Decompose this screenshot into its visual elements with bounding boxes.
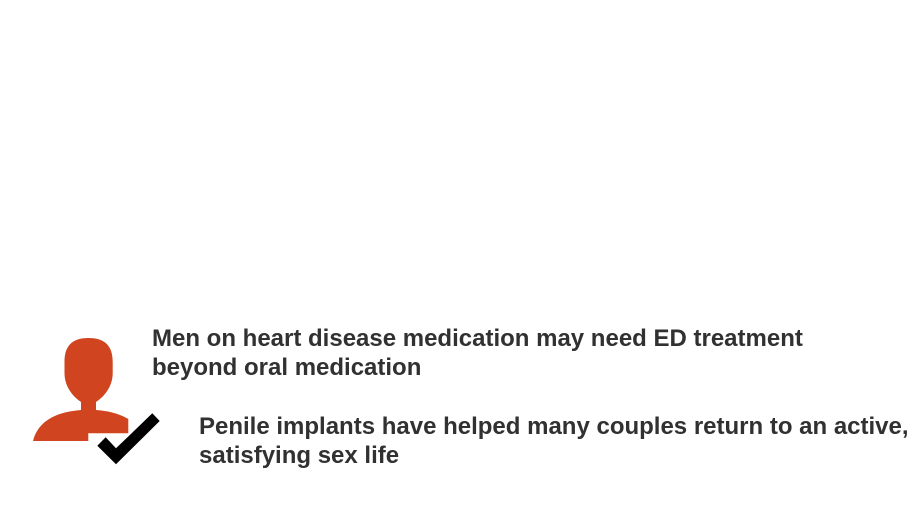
icon: check mark: [97, 413, 160, 464]
text: heart disease medication statement: [152, 325, 803, 381]
text: penile implants statement: [199, 413, 909, 469]
text: heart disease medication statement: Men on heart disease medication may need ED treatment: [152, 325, 803, 352]
text: penile implants statement: Penile implants have helped many couples return to an active,: [199, 413, 909, 440]
text: heart disease medication statement: beyond oral medication: [152, 354, 421, 381]
icon: person silhouette: [33, 338, 128, 441]
text: penile implants statement: satisfying sex life: [199, 442, 399, 469]
